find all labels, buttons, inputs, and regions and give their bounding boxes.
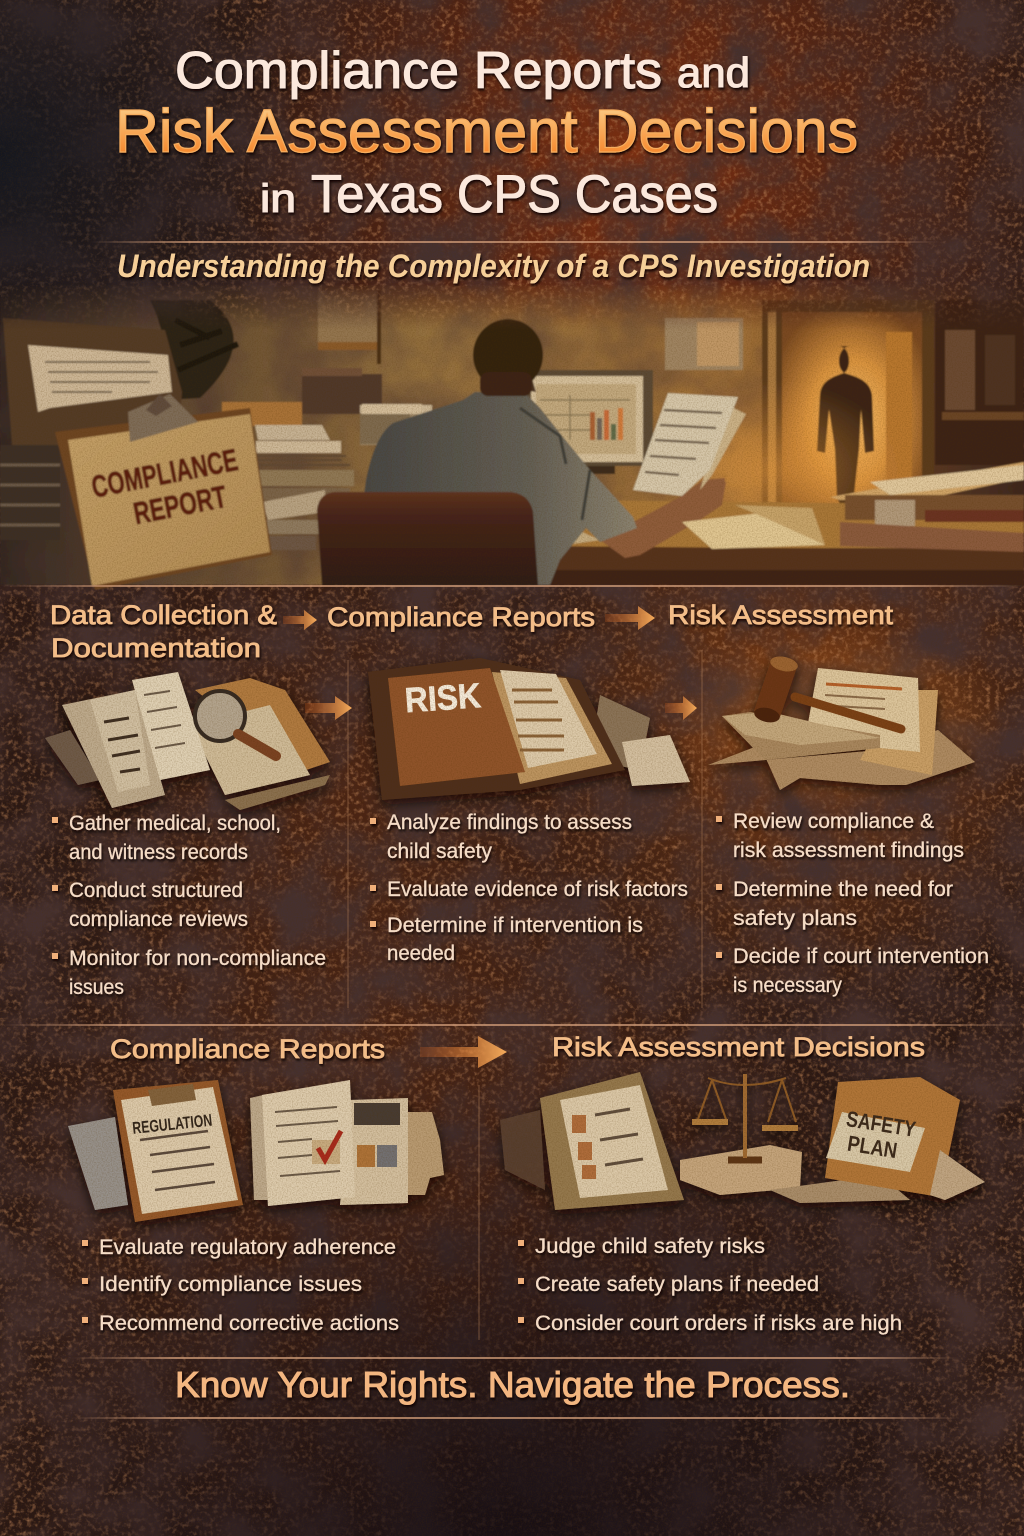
chair — [317, 492, 538, 585]
safety plan label: SAFETY — [845, 1106, 918, 1142]
title: and — [677, 49, 750, 96]
wall frames and cabinet — [222, 290, 743, 445]
arrow — [605, 606, 655, 630]
bullet list: risk assessment decisions — [518, 1235, 902, 1335]
bullet list: compliance reports outcomes: Recommend corrective actions — [99, 1312, 399, 1335]
bullet list: risk assessment: Decide if court intervention — [733, 945, 989, 968]
title — [115, 42, 858, 224]
bullet list: risk assessment decisions: Create safety plans if needed — [535, 1273, 819, 1296]
title: Risk Assessment Decisions — [115, 97, 858, 165]
bullet list: data collection: and witness records — [69, 841, 248, 864]
illustration: risk folder — [368, 658, 690, 800]
desk — [530, 500, 1024, 585]
arrow — [283, 610, 317, 630]
binders — [830, 462, 1024, 552]
bullet list: data collection: Gather medical, school, — [69, 812, 281, 835]
monitor — [525, 370, 653, 474]
bullet list: compliance reports — [370, 811, 688, 965]
risk label: RISK — [404, 676, 482, 720]
title: Texas CPS Cases — [311, 165, 718, 224]
illustration: scales, files and safety plan folder — [500, 1072, 985, 1210]
title: Compliance Reports — [175, 42, 662, 100]
bullet list: risk assessment: is necessary — [733, 974, 842, 997]
bullet list: data collection: issues — [69, 976, 124, 999]
door with glow — [762, 300, 934, 514]
compliance report clipboard — [55, 394, 272, 590]
bullet list: compliance reports: child safety — [387, 840, 492, 863]
pipeline heading: data collection — [50, 600, 277, 663]
papers held in hand — [632, 392, 746, 497]
pipeline heading: risk assessment: Risk Assessment — [668, 600, 894, 630]
column dividers — [348, 650, 702, 1340]
hero illustration: analyst at desk — [0, 285, 1024, 590]
safety plan label — [841, 1106, 918, 1166]
bullet list: compliance reports: Evaluate evidence of risk factors — [387, 878, 688, 901]
bullet list: compliance reports: Analyze findings to assess — [387, 811, 632, 834]
bullet list: risk assessment decisions: Consider court orders if risks are high — [535, 1312, 902, 1335]
bullet list: risk assessment: risk assessment findings — [733, 839, 964, 862]
bullet list: compliance reports outcomes — [82, 1236, 399, 1335]
clipboard label — [91, 448, 240, 525]
arrow — [305, 696, 352, 720]
arrow — [420, 1036, 507, 1068]
heading: compliance reports: Compliance Reports — [110, 1034, 385, 1064]
illustration: regulation clipboard and checked report — [68, 1080, 444, 1222]
bullet list: compliance reports: Determine if intervention is — [387, 914, 643, 937]
bullet list: data collection: Monitor for non-compliance — [69, 947, 326, 970]
clipboard label: REPORT — [130, 479, 229, 531]
balance scale — [692, 1074, 798, 1160]
safety plan label: PLAN — [846, 1131, 899, 1163]
desk papers — [682, 505, 825, 549]
pipeline heading: data collection: Data Collection & — [50, 600, 277, 630]
illustration: gavel and papers — [670, 630, 1010, 810]
right shelves — [935, 300, 1024, 465]
bullet list: compliance reports outcomes: Identify compliance issues — [99, 1273, 362, 1296]
heading: risk assessment decisions: Risk Assessment Decisions — [552, 1032, 925, 1062]
regulation label: REGULATION — [131, 1111, 213, 1138]
subtitle: Understanding the Complexity of a CPS Investigation — [117, 248, 870, 284]
bullet list: data collection — [52, 812, 326, 999]
bullet list: data collection: Conduct structured — [69, 879, 243, 902]
bullet list: data collection: compliance reviews — [69, 908, 248, 931]
silhouette in doorway — [817, 346, 874, 514]
man — [362, 319, 725, 585]
bullet list: risk assessment: Determine the need for — [733, 878, 953, 901]
bullet list: risk assessment: safety plans — [733, 907, 857, 930]
bullet list: compliance reports: needed — [387, 942, 455, 965]
bullet list: compliance reports outcomes: Evaluate regulatory adherence — [99, 1236, 396, 1259]
footer slogan: Know Your Rights. Navigate the Process. — [175, 1364, 850, 1405]
bullet list: risk assessment — [716, 810, 989, 997]
pipeline heading: compliance reports: Compliance Reports — [327, 602, 595, 632]
illustration: documents and magnifier — [45, 672, 330, 810]
title: in — [260, 177, 296, 221]
notice board and plant — [0, 300, 238, 540]
bullet list: risk assessment decisions: Judge child safety risks — [535, 1235, 765, 1258]
pipeline heading: data collection: Documentation — [51, 633, 261, 663]
clipboard label: COMPLIANCE — [89, 442, 241, 505]
bullet list: risk assessment: Review compliance & — [733, 810, 934, 833]
paper stack beside clipboard — [255, 404, 422, 550]
arrow — [665, 696, 697, 720]
